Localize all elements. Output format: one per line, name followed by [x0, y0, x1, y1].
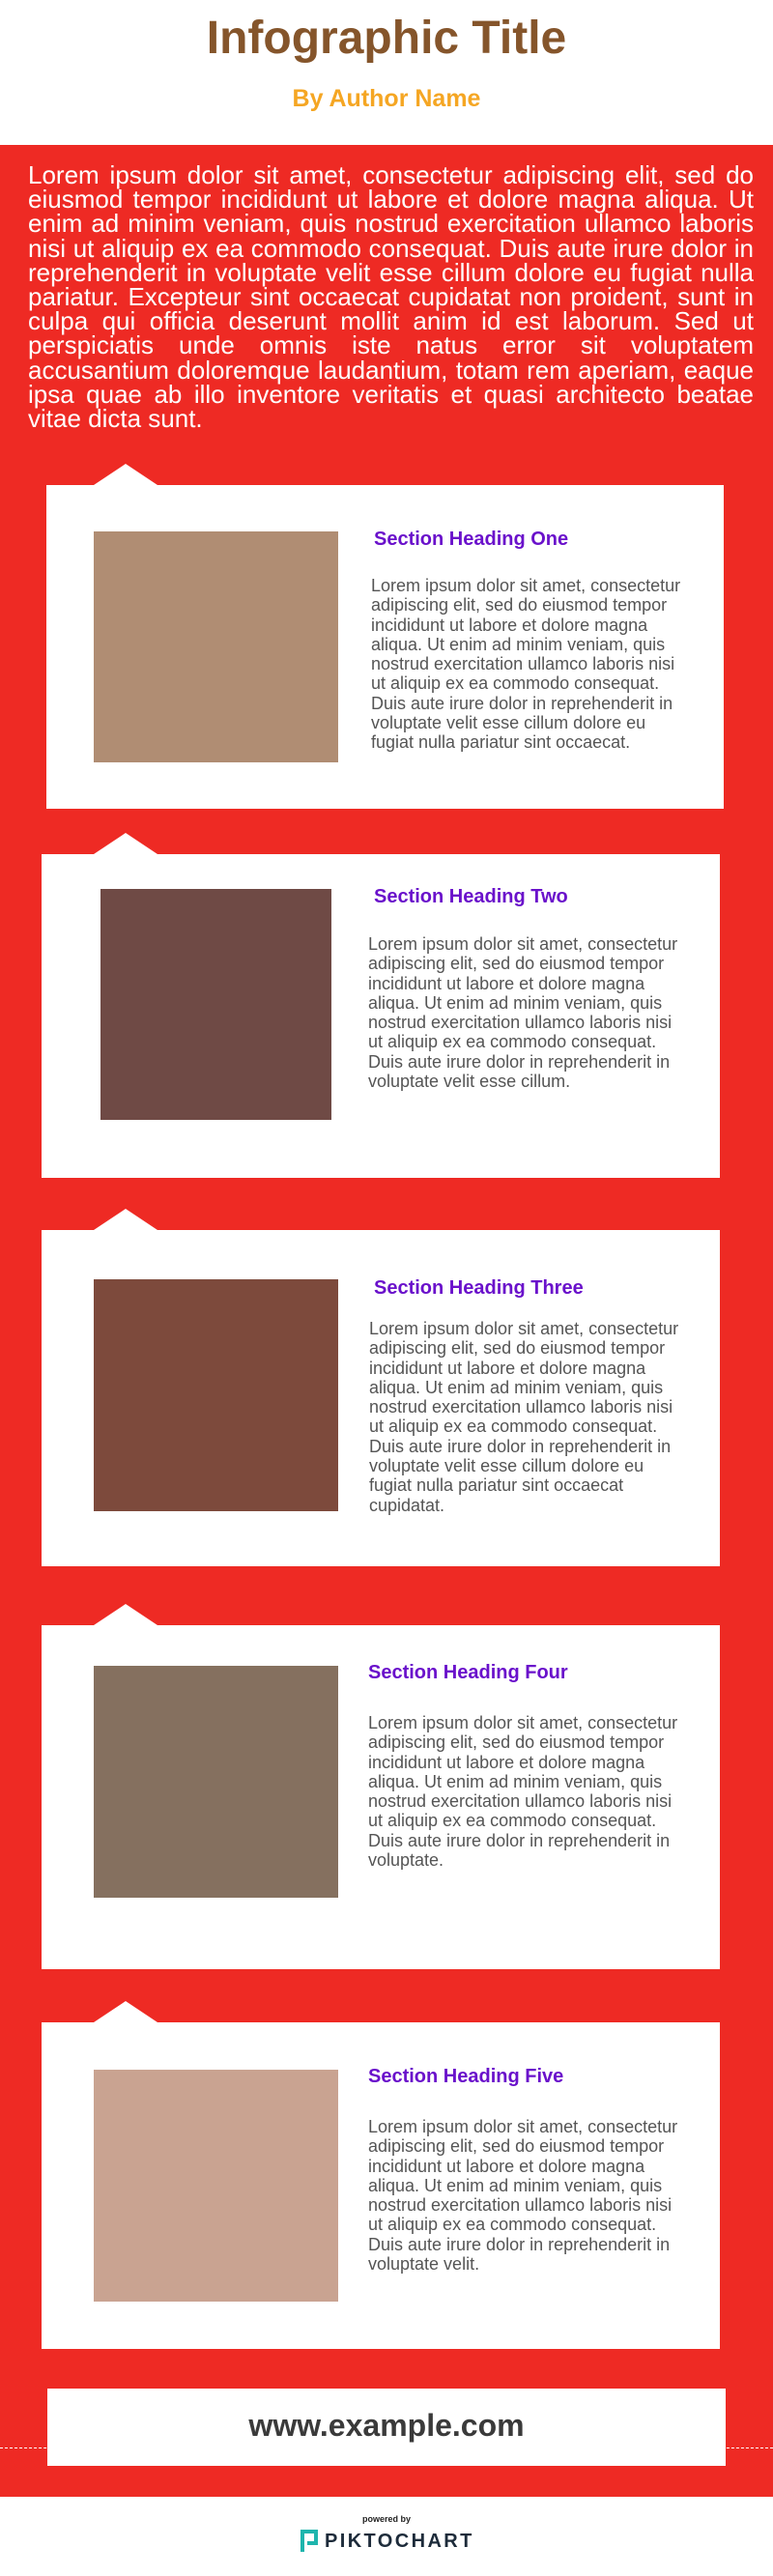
- section heading: Section Heading Four: [368, 1662, 568, 1683]
- subtitle: By Author Name: [293, 85, 480, 112]
- section text: Lorem ipsum dolor sit amet, consectetur adipiscing elit, sed do eiusmod tempor incididunt ut labore et dolore magna aliqua. Ut enim ad minim veniam, quis nostrud exercitation ullamco laboris nisi ut aliquip ex ea commodo consequat. Duis aute irure dolor in reprehenderit in voluptate velit esse cillum.: [368, 934, 677, 1091]
- powered by credit: powered by: [362, 2514, 411, 2524]
- image placeholder: [94, 1666, 338, 1898]
- notch: [94, 1209, 157, 1230]
- icon: brand mark: [301, 2530, 318, 2552]
- section heading: Section Heading Two: [374, 886, 568, 907]
- panel: section four: [42, 1625, 720, 1969]
- notch: [94, 464, 157, 485]
- section text: Lorem ipsum dolor sit amet, consectetur adipiscing elit, sed do eiusmod tempor incididunt ut labore et dolore magna aliqua. Ut enim ad minim veniam, quis nostrud exercitation ullamco laboris nisi ut aliquip ex ea commodo consequat. Duis aute irure dolor in reprehenderit in voluptate velit esse cillum dolore eu fugiat nulla pariatur sint occaecat cupidatat.: [369, 1319, 678, 1515]
- section heading: Section Heading Three: [374, 1277, 584, 1299]
- image placeholder: [94, 2070, 338, 2302]
- brand name: PIKTOCHART: [325, 2531, 474, 2552]
- panel: section one: [46, 485, 724, 809]
- image placeholder: [94, 531, 338, 762]
- title: Infographic Title: [207, 13, 566, 64]
- notch: [94, 833, 157, 854]
- panel: section five: [42, 2022, 720, 2349]
- notch: [94, 2001, 157, 2022]
- section text: Lorem ipsum dolor sit amet, consectetur adipiscing elit, sed do eiusmod tempor incididunt ut labore et dolore magna aliqua. Ut enim ad minim veniam, quis nostrud exercitation ullamco laboris nisi ut aliquip ex ea commodo consequat. Duis aute irure dolor in reprehenderit in voluptate velit esse cillum dolore eu fugiat nulla pariatur sint occaecat.: [371, 576, 680, 752]
- image placeholder: [94, 1279, 338, 1511]
- footer callout: [47, 2389, 726, 2466]
- panel: section three: [42, 1230, 720, 1566]
- brand wordmark with icon: [301, 2530, 474, 2552]
- section text: Lorem ipsum dolor sit amet, consectetur adipiscing elit, sed do eiusmod tempor incididunt ut labore et dolore magna aliqua. Ut enim ad minim veniam, quis nostrud exercitation ullamco laboris nisi ut aliquip ex ea commodo consequat. Duis aute irure dolor in reprehenderit in voluptate velit.: [368, 2117, 677, 2274]
- image placeholder: [100, 889, 331, 1120]
- footer callout: www.example.com: [248, 2408, 525, 2443]
- section heading: Section Heading One: [374, 529, 568, 550]
- notch: [94, 1604, 157, 1625]
- section text: Lorem ipsum dolor sit amet, consectetur adipiscing elit, sed do eiusmod tempor incididunt ut labore et dolore magna aliqua. Ut enim ad minim veniam, quis nostrud exercitation ullamco laboris nisi ut aliquip ex ea commodo consequat. Duis aute irure dolor in reprehenderit in voluptate.: [368, 1713, 677, 1870]
- panel: section two: [42, 854, 720, 1178]
- intro text block: Lorem ipsum dolor sit amet, consectetur adipiscing elit, sed do eiusmod tempor incididunt ut labore et dolore magna aliqua. Ut enim ad minim veniam, quis nostrud exercitation ullamco laboris nisi ut aliquip ex ea commodo consequat. Duis aute irure dolor in reprehenderit in voluptate velit esse cillum dolore eu fugiat nulla pariatur. Excepteur sint occaecat cupidatat non proident, sunt in culpa qui officia deserunt mollit anim id est laborum. Sed ut perspiciatis unde omnis iste natus error sit voluptatem accusantium doloremque laudantium, totam rem aperiam, eaque ipsa quae ab illo inventore veritatis et quasi architecto beatae vitae dicta sunt.: [28, 160, 754, 433]
- section heading: Section Heading Five: [368, 2066, 563, 2087]
- dashed line: [0, 2447, 773, 2448]
